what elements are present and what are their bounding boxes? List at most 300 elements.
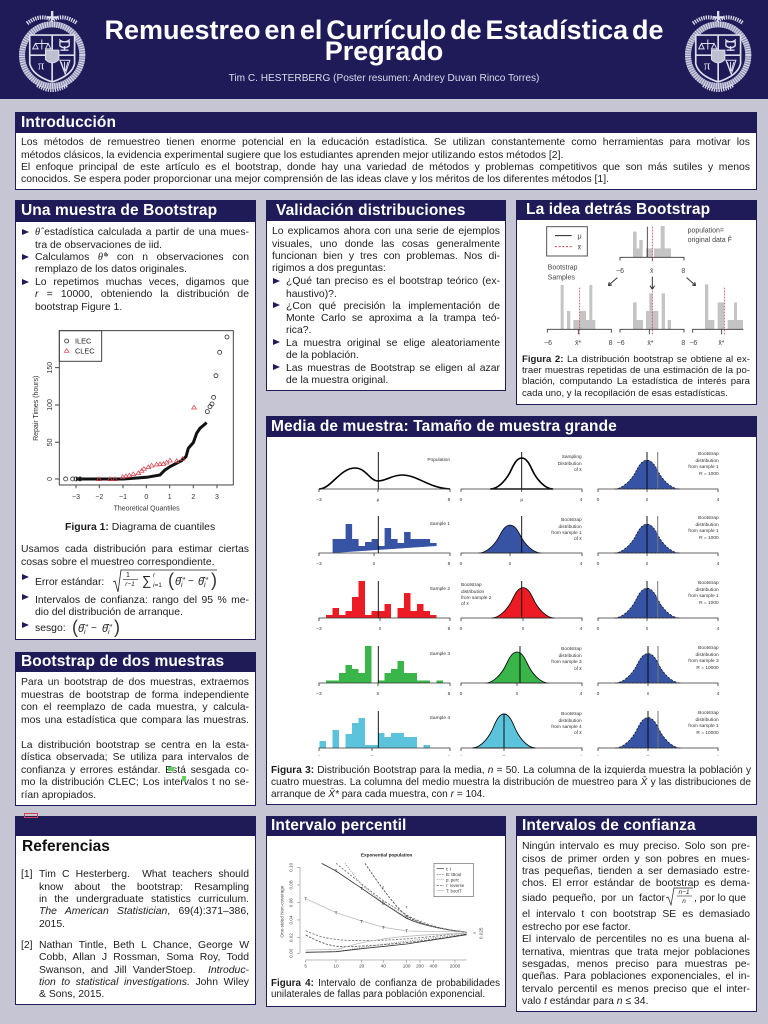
bullet list: estimaciones: Error estándar:: [35, 577, 104, 588]
diagram: remuestreo bootstrap: original data F̂: [688, 236, 732, 244]
formula: sesgo: θ̂: [78, 623, 84, 635]
text block: preguntas: rigimos a dos preguntas:: [272, 263, 386, 274]
caption: figura 1: Figura 1: Diagrama de cuantiles: [65, 522, 215, 532]
heading band: referencias: [15, 816, 256, 836]
bullet list: definición: θ̂ estadística calculada a partir de una mues-: [35, 227, 249, 238]
icon: left university crest: [19, 11, 86, 92]
axis labels and annotations: 4: [580, 497, 583, 503]
axis labels and annotations: x̄: [373, 561, 376, 567]
heading: intervalos de confianza: [516, 816, 757, 836]
text block: preguntas: Monte Carlo se aproxima a la trampa teó-: [286, 313, 500, 324]
axis labels and annotations: 8: [448, 691, 451, 697]
chart: distribuciones bootstrap para la media: Bootstrap: [461, 582, 482, 588]
chart: exponential population: Exponential population: [361, 852, 413, 857]
title: [104, 15, 664, 66]
panel: introducción: [15, 112, 757, 190]
text block: preguntas: Lo explicamos ahora con una serie de ejemplos: [272, 226, 500, 237]
reference list: [21, 869, 249, 1000]
axis labels and annotations: 8: [448, 626, 451, 632]
formula: sesgo: i: [84, 629, 86, 636]
chart: diagrama de cuantiles: 100: [47, 399, 54, 411]
axis labels and annotations: x̄: [379, 626, 382, 632]
chart: distribuciones bootstrap para la media: Sample 3: [430, 651, 450, 657]
text block: introducción: El enfoque principal de este artículo es el bootstrap, donde hay una variedad de métodos y problemas competitivos que son más sutiles y menos: [21, 162, 750, 172]
axis labels and annotations: -: [460, 754, 462, 759]
heading: la idea detrás bootstrap: [516, 200, 757, 220]
diagram: remuestreo bootstrap: x̄: [578, 245, 582, 252]
caption: figura 2: cada uno, y la recopilación de esas estadísticas.: [522, 388, 728, 398]
chart: diagrama de cuantiles: 0: [144, 494, 148, 501]
reference list: [1]: [21, 869, 33, 880]
formula: sesgo: *: [86, 624, 89, 631]
formula: error estándar: −: [188, 576, 194, 587]
chart: distribuciones bootstrap para la media: Bootstrap: [561, 517, 582, 523]
reference list: [2]: [21, 940, 33, 950]
heading: intervalo percentil: Intervalo percentil: [271, 817, 406, 834]
chart: distribuciones bootstrap para la media: Distribution: [558, 461, 582, 467]
reference list: know about the bootstrap: Resampling: [39, 882, 249, 892]
formula: sesgo: θ̂̄: [102, 623, 108, 635]
panel: media de muestra: [266, 416, 757, 805]
axis labels and annotations: 4: [580, 626, 583, 632]
chart: diagrama de cuantiles: −1: [119, 494, 127, 501]
chart: exponential population: T: [335, 910, 338, 915]
reference list: & Sons, 2015.: [39, 989, 104, 1000]
chart: distribuciones bootstrap para la media: from sample 1: [551, 530, 582, 536]
chart: exponential population: 20: [359, 964, 365, 969]
chart: exponential population: T: [360, 886, 363, 891]
axis labels and annotations: 0: [597, 626, 600, 632]
axis labels and annotations: 8: [448, 497, 451, 503]
text block: intervalos: valo t estándar para n ≤ 34.: [522, 996, 648, 1007]
axis labels and annotations: x̄: [522, 626, 525, 632]
chart: exponential population: p: perc: [446, 877, 460, 882]
text block: preguntas: de la población.: [286, 350, 359, 361]
text block: dos muestras: con el reemplazo de cada muestra, y calcula-: [21, 702, 249, 713]
heading: una muestra de bootstrap: Una muestra de Bootstrap: [21, 202, 217, 219]
text block: uso de la distribución: Usamos cada distribución para estimar ciertas: [21, 544, 249, 555]
bullet list: definición: r = 10000, obteniendo la distribución de: [35, 289, 249, 300]
chart: distribuciones bootstrap para la media: from sample 1: [688, 464, 719, 470]
annotation marks: green: [168, 767, 186, 781]
axis labels and annotations: -: [318, 754, 320, 759]
heading: validación distribuciones: Validación distribuciones: [276, 202, 465, 219]
caption: figura 3: [271, 765, 751, 800]
formula: error estándar: i: [204, 582, 206, 589]
axis labels and annotations: x̄: [646, 626, 649, 632]
chart: exponential population: 0.06: [288, 898, 293, 907]
reference list: Swanson, and Jill VanderStoep. Introduc-: [39, 964, 249, 976]
diagram: remuestreo bootstrap: 8: [681, 340, 685, 347]
text block: uso de la distribución: [21, 544, 249, 568]
chart: distribuciones bootstrap para la media: R = 1000: [699, 600, 719, 606]
diagram: remuestreo bootstrap: −6: [616, 268, 624, 275]
axis labels and annotations: x̄: [647, 691, 650, 697]
chart: distribuciones bootstrap para la media: R = 10000: [696, 730, 719, 736]
reference list: The American Statistician, 69(4):371–386,: [39, 906, 249, 917]
chart: exponential population: T: [360, 919, 363, 924]
caption: figura 3: arranque de X̄* para cada muestra, con r = 104.: [271, 789, 485, 800]
axis labels and annotations: 4: [580, 561, 583, 567]
chart: diagrama de cuantiles: −3: [72, 494, 80, 501]
bullet list: definición: [22, 227, 249, 313]
chart: exponential population: B: [382, 900, 385, 905]
chart: distribuciones bootstrap para la media: Bootstrap: [698, 580, 719, 586]
chart: distribuciones bootstrap para la media: Sampling: [562, 454, 582, 460]
caption: figura 2: Figura 2: La distribución bootstrap se obtiene al ex-: [522, 354, 750, 365]
chart: distribuciones bootstrap para la media: Population: [427, 457, 450, 463]
axis labels and annotations: 4: [580, 691, 583, 697]
panel: validación distribuciones: [266, 200, 506, 391]
chart: exponential population: r: [406, 904, 408, 909]
text block: intervalos: sesgadas, menos preciso para muestras pe-: [522, 959, 750, 970]
heading: bootstrap de dos muestras: Bootstrap de dos muestras: [21, 653, 224, 670]
axis labels and annotations: 0: [597, 497, 600, 503]
text block: dos muestras: rían apropiados.: [21, 790, 96, 800]
formula: error estándar: r: [153, 572, 156, 579]
row: sample 4: [320, 711, 681, 748]
chart: exponential population: 0.00: [288, 948, 293, 958]
chart: distribuciones bootstrap para la media: from sample 2: [461, 595, 492, 601]
chart: exponential population: B: tBoot: [446, 872, 462, 877]
formula: sesgo: (: [72, 617, 78, 637]
chart: distribuciones bootstrap para la media: Bootstrap: [698, 515, 719, 521]
diagram: remuestreo bootstrap: x̄: [650, 268, 654, 275]
formula: error estándar: θ̂̄: [198, 576, 204, 588]
chart: distribuciones bootstrap para la media: from sample 1: [688, 723, 719, 729]
chart: distribuciones bootstrap para la media: from sample 4: [551, 724, 582, 730]
text block: preguntas: [272, 226, 500, 386]
reference list: Cobb, Allan J Rossman, Soma Roy, Todd: [39, 952, 249, 963]
text block: dos muestras: La distribución bootstrap se centra en la esta-: [21, 740, 249, 750]
chart: distribuciones bootstrap para la media: of x̄: [574, 730, 582, 736]
text block: preguntas: rica?.: [286, 325, 311, 336]
chart: exponential population: 0.08: [288, 880, 293, 890]
chart: exponential population: 0.10: [288, 862, 293, 872]
heading: intervalos de confianza: Intervalos de confianza: [522, 817, 696, 834]
diagram: remuestreo bootstrap: population=: [688, 228, 724, 235]
row: sample 2: [326, 581, 680, 618]
chart: exponential population: T: [335, 869, 338, 874]
chart: distribuciones bootstrap para la media: of x̄: [461, 601, 469, 607]
caption: figura 3: Figura 3: Distribución Bootstrap para la media, n = 50. La columna de la izquierda muestra la población y: [271, 765, 751, 776]
chart: distribuciones bootstrap para la media: R = 1000: [699, 471, 719, 477]
text block: dos muestras: dística observada; Se utiliza para intervalos de: [21, 752, 249, 763]
axis labels and annotations: x̄: [377, 691, 380, 697]
text block: intervalos: Ningún intervalo es muy preciso. Solo son pre-: [522, 841, 750, 852]
diagram: remuestreo bootstrap: x̄*: [647, 340, 654, 347]
text block: intervalos: queñas. Para poblaciones exponenciales, el in-: [522, 971, 750, 982]
reference list: Tim C Hesterberg. What teachers should: [39, 869, 249, 880]
axis labels and annotations: 4: [717, 561, 720, 567]
chart: exponential population: 10: [333, 964, 339, 969]
chart: distribuciones bootstrap para la media: Bootstrap: [698, 451, 719, 457]
formula: factor raíz: n−1: [678, 889, 690, 896]
text block: preguntas: haustivo)?.: [286, 288, 337, 300]
panel: intervalo percentil: [266, 816, 506, 1007]
axis labels and annotations: [316, 497, 720, 759]
chart: distribuciones bootstrap para la media: distribution: [695, 458, 719, 464]
formula: error estándar: (: [168, 570, 174, 590]
diagram: remuestreo bootstrap: 8: [609, 340, 613, 347]
chart: exponential population: r: reverse: [446, 883, 465, 888]
panel: la idea detrás bootstrap: [516, 200, 757, 405]
text block: intervalos: tervalo percentil es menos preciso que el inter-: [522, 984, 750, 994]
text block: preguntas: ¿Qué tan preciso es el bootstrap teórico (ex-: [286, 276, 500, 287]
chart: diagrama de cuantiles: Theoretical Quantiles: [114, 505, 180, 512]
axis labels and annotations: 0: [460, 561, 463, 567]
chart: distribuciones bootstrap para la media: Bootstrap: [698, 645, 719, 651]
axis labels and annotations: 0: [597, 691, 600, 697]
chart: diagrama de cuantiles: −2: [95, 494, 103, 501]
diagram: remuestreo bootstrap: x̄*: [575, 340, 581, 347]
icon: right university crest: π: [704, 59, 711, 73]
axis labels and annotations: –: [647, 754, 650, 759]
subtitle: authors: Tim C. HESTERBERG (Poster resumen: Andrey Duvan Rinco Torres): [229, 73, 539, 84]
caption: figura 4: Figura 4: Intervalo de confianza de probabilidades: [271, 978, 500, 989]
chart: exponential population: 2000: [450, 964, 461, 969]
chart: distribuciones bootstrap para la media: distribution: [461, 589, 485, 595]
diagram: remuestreo bootstrap: −6: [689, 340, 697, 347]
axis labels and annotations: x̄: [516, 691, 519, 697]
diagram: remuestreo bootstrap: −6: [617, 340, 625, 347]
text block: intervalos: chos. El error estándar de bootstrap es dema-: [522, 878, 750, 889]
axis labels and annotations: 0: [460, 497, 463, 503]
caption: figura 4: [271, 978, 500, 1000]
formula: error estándar: i: [181, 582, 183, 589]
chart: exponential population: 0.02: [288, 933, 293, 942]
axes: [319, 489, 718, 751]
chart: diagrama de cuantiles: Repair Times (hours): [33, 376, 40, 441]
formula: error estándar: θ̂: [175, 576, 181, 588]
chart: distribuciones bootstrap para la media: distribution: [695, 522, 719, 528]
formula: error estándar: ∑: [142, 573, 151, 588]
chart: distribuciones bootstrap para la media: of x̄: [574, 666, 582, 672]
bullet list: estimaciones: Intervalos de confianza: rango del 95 % me-: [35, 595, 249, 606]
chart: distribuciones bootstrap para la media: of x̄: [574, 536, 582, 542]
chart: exponential population: r: [383, 885, 385, 890]
diagram: remuestreo bootstrap: Samples: [548, 274, 575, 281]
heading: una muestra de bootstrap: [15, 200, 256, 222]
text block: introducción: [21, 137, 750, 185]
chart: exponential population: t: t: [446, 866, 452, 871]
formula: sesgo: −: [91, 623, 97, 634]
chart: exponential population: 400: [429, 964, 438, 969]
text block: intervalos: [522, 841, 750, 1007]
chart: distribuciones bootstrap para la media: R = 1000: [699, 535, 719, 541]
text block: intervalos: ternativa, mientras que trata mejor poblaciones: [522, 946, 750, 958]
chart: diagrama de cuantiles: 2: [191, 494, 195, 501]
axis labels and annotations: −3: [316, 561, 322, 567]
chart: distribuciones bootstrap para la media: from sample 3: [688, 658, 719, 664]
formula: error estándar: 1: [126, 572, 130, 579]
text block: intervalos: cisos de primer orden y son pobres en mues-: [522, 854, 750, 864]
text block: intervalos: , por lo que: [694, 893, 746, 904]
formula: sesgo: i: [108, 629, 110, 636]
axis labels and annotations: x̄: [646, 497, 649, 503]
reference list: in the undergraduate statistics curriculum.: [39, 894, 249, 904]
row: sample 3: [326, 646, 681, 683]
text block: dos muestras: [21, 677, 249, 800]
icon: left university crest: π: [38, 59, 45, 73]
formula: error estándar: [112, 570, 217, 592]
diagram: remuestreo bootstrap: Bootstrap: [548, 264, 578, 271]
chart: exponential population: 0.025: [478, 927, 483, 939]
chart: diagrama de cuantiles: CLEC: [75, 346, 95, 355]
heading: media de muestra: [266, 416, 757, 437]
reference list: 2015.: [39, 918, 65, 930]
chart: diagrama de cuantiles: 3: [215, 494, 219, 501]
axis labels and annotations: 0: [597, 561, 600, 567]
diagram: remuestreo bootstrap: −6: [544, 340, 552, 347]
chart: diagrama de cuantiles: [32, 330, 234, 512]
text block: preguntas: Las muestras de Bootstrap se eligen al azar: [286, 362, 500, 374]
text block: preguntas: de la muestra original.: [286, 375, 388, 386]
chart: distribuciones bootstrap para la media: distribution: [695, 717, 719, 723]
axis labels and annotations: 4: [717, 626, 720, 632]
bullet list: estimaciones: sesgo:: [35, 623, 66, 634]
bullet list: definición: tra de observaciones de iid.: [35, 240, 162, 251]
formula: error estándar: r−1: [125, 581, 135, 588]
caption: figura 2: [522, 354, 750, 398]
panel: referencias: [15, 816, 256, 1005]
title: Pregrado: [325, 36, 443, 66]
text block: introducción: conocidos. Se espera poder proporcionar una mejor comprensión de las ideas clave y los méritos de los diferentes métodos [1].: [21, 174, 609, 185]
caption: figura 2: traer muestras repetidas de una estimación de la po-: [522, 365, 750, 376]
text block: intervalos: siado pequeño, por un factor: [522, 893, 665, 904]
axis labels and annotations: −3: [316, 691, 322, 697]
chart: exponential population: B: [405, 914, 408, 919]
axis labels and annotations: x̄: [646, 561, 649, 567]
chart: distribuciones bootstrap para la media: R = 10000: [696, 665, 719, 671]
formula: error estándar: ): [211, 570, 217, 590]
panel: intervalos de confianza: [516, 816, 757, 1012]
chart: distribuciones bootstrap para la media: Sample 1: [430, 521, 450, 527]
text block: dos muestras: confianza y errores estándar. Está sesgada co-: [21, 764, 249, 776]
diagram: remuestreo bootstrap: [544, 226, 744, 347]
formula: sesgo: *: [110, 624, 113, 631]
axis labels and annotations: 4: [717, 691, 720, 697]
diagram: remuestreo bootstrap: x̄*: [718, 340, 725, 347]
reference list: tion to statistical investigations. John Wiley: [39, 976, 249, 988]
caption: figura 2: blación, computando La estadística de interés para: [522, 376, 750, 387]
chart: distribuciones bootstrap para la media: Bootstrap: [561, 646, 582, 652]
chart: distribuciones bootstrap para la media: Sample 2: [430, 586, 450, 592]
text block: preguntas: funcionan bien y tres con problemas. Nos di-: [272, 250, 500, 262]
reference list: Nathan Tintle, Beth L Chance, George W: [39, 940, 249, 950]
chart: diagrama de cuantiles: ILEC: [75, 337, 92, 346]
diagram: remuestreo bootstrap: 8: [681, 268, 685, 275]
axis labels and annotations: 4: [717, 497, 720, 503]
heading: intervalo percentil: [266, 816, 506, 836]
text block: intervalos: el intervalo t con bootstrap SE es demasiado: [522, 909, 750, 920]
chart: distribuciones bootstrap para la media: distribution: [558, 718, 582, 724]
formula: error estándar: *: [183, 577, 186, 584]
diagram: remuestreo bootstrap: μ: [578, 233, 582, 240]
axis labels and annotations: −3: [316, 497, 322, 503]
axis labels and annotations: -: [580, 754, 582, 759]
text block: intervalos: El intervalo de percentiles no es una buena al-: [522, 934, 750, 945]
panel: una muestra de bootstrap: [15, 200, 256, 640]
chart: distribuciones bootstrap para la media: distribution: [695, 587, 719, 593]
chart: exponential population: One-sided Non-coverage: [280, 885, 285, 938]
text block: dos muestras: mo la distribución CLEC; Los intervalos t no se-: [21, 777, 249, 788]
caption: figura 4: unilaterales de fallas para población exponencial.: [271, 989, 485, 1000]
axis labels and annotations: x̄: [509, 561, 512, 567]
chart: exponential population: [280, 852, 483, 969]
chart: distribuciones bootstrap para la media: distribution: [695, 652, 719, 658]
axis labels and annotations: μ: [520, 498, 523, 503]
heading: validación distribuciones: [266, 200, 506, 221]
axis labels and annotations: -: [448, 754, 450, 759]
annotation mark: red rectangle: [24, 813, 38, 818]
chart: exponential population: T: [405, 928, 408, 933]
bullet list: definición: remplazo de los datos originales.: [35, 264, 187, 275]
heading: media de muestra: Media de muestra: Tamaño de muestra grande: [271, 418, 617, 435]
heading: introducción: [15, 112, 757, 133]
chart: exponential population: T: bootT: [446, 888, 462, 893]
chart: distribuciones bootstrap para la media: distribution: [558, 524, 582, 530]
axis labels and annotations: 8: [448, 561, 451, 567]
text block: preguntas: La muestra original se elige aleatoriamente: [286, 338, 500, 348]
chart: diagrama de cuantiles: 1: [168, 494, 172, 501]
formula: error estándar: i=1: [153, 582, 162, 589]
chart: diagrama de cuantiles: 150: [47, 362, 54, 373]
panel: bootstrap de dos muestras: [15, 652, 256, 806]
chart: exponential population: T: [304, 897, 307, 902]
text block: intervalos: estrecho por ese factor.: [522, 922, 631, 932]
axis labels and annotations: –: [371, 754, 374, 759]
formula: factor raíz: n: [682, 898, 686, 905]
formula: sesgo: ): [114, 617, 120, 637]
text block: preguntas: visuales, uno donde las cosas generalmente: [272, 238, 500, 250]
axis labels and annotations: –: [503, 754, 506, 759]
text block: introducción: Los métodos de remuestreo tienen enorme potencial en la educación estadística. Se utilizan constantemente como herramientas para motivar los: [21, 137, 750, 148]
chart: distribuciones bootstrap para la media: from sample 1: [688, 593, 719, 599]
chart: diagrama de cuantiles: 0: [47, 477, 54, 481]
chart: distribuciones bootstrap para la media: Bootstrap: [698, 710, 719, 716]
chart: distribuciones bootstrap para la media: Bootstrap: [561, 711, 582, 717]
chart: distribuciones bootstrap para la media: Sample 4: [430, 715, 450, 721]
bullet list: estimaciones: dio del distribución de arranque.: [35, 607, 183, 618]
chart: distribuciones bootstrap para la media: [316, 451, 720, 759]
title: Remuestreo en el Currículo de Estadística de: [104, 15, 664, 45]
bullet list: definición: Lo repetimos muchas veces, digamos que: [35, 277, 249, 288]
heading: referencias: Referencias: [22, 838, 110, 855]
chart: exponential population: 40: [381, 964, 386, 969]
row: population: [319, 452, 680, 489]
heading: introducción: Introducción: [21, 114, 116, 131]
axis labels and annotations: μ: [377, 498, 380, 503]
icon: right university crest: [685, 11, 752, 92]
chart: distribuciones bootstrap para la media: of x̄: [574, 467, 582, 473]
chart: exponential population: 100: [403, 964, 411, 969]
chart: exponential population: 5: [304, 964, 307, 969]
formula: error estándar: *: [206, 577, 209, 584]
text block: uso de la distribución: cosas sobre el muestreo correspondiente.: [21, 557, 214, 568]
chart: exponential population: T: [382, 925, 385, 930]
text block: dos muestras: Para un bootstrap de dos muestras, extraemos: [21, 677, 249, 688]
chart: exponential population: 200: [416, 964, 424, 969]
text block: preguntas: ¿Con qué precisión la implementación de: [286, 300, 500, 312]
chart: distribuciones bootstrap para la media: from sample 1: [688, 528, 719, 534]
text block: dos muestras: mos una estadística que compara las muestras.: [21, 714, 249, 726]
formula: factor raíz: [666, 888, 693, 906]
row: sample 1: [333, 516, 680, 553]
heading: la idea detrás bootstrap: La idea detrás Bootstrap: [526, 201, 710, 218]
text block: introducción: métodos clásicos, la evidencia experimental sugiere que los estudiantes aprenden mejor utilizando estos métodos [2].: [21, 150, 563, 160]
bullet list: definición: Calculamos θ̂* con n observaciones con: [35, 252, 249, 263]
